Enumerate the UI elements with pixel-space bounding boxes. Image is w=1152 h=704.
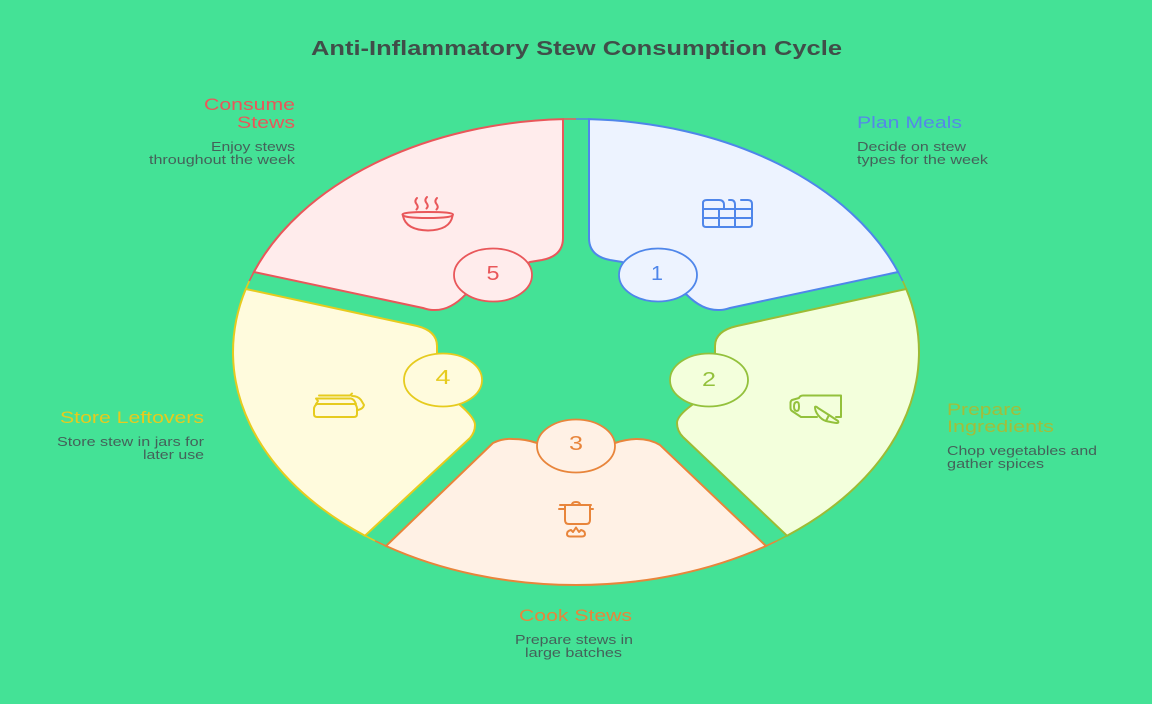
number badge 1	[619, 248, 697, 302]
text block: prepare ingredients: gather spices	[947, 456, 1045, 471]
text block: consume stews	[149, 95, 296, 167]
text block: plan meals: Decide on stew	[857, 139, 967, 154]
number badge 4	[404, 354, 482, 406]
icon: jar with lid	[314, 394, 364, 417]
number badge 2: 2	[702, 369, 716, 391]
title: Anti-Inflammatory Stew Consumption Cycle	[311, 38, 842, 60]
icon: steaming bowl	[402, 197, 453, 230]
text block: prepare ingredients: Prepare	[947, 400, 1022, 419]
text block: prepare ingredients: Ingredients	[947, 417, 1054, 436]
text block: store leftovers: Store Leftovers	[60, 408, 204, 427]
text block: prepare ingredients	[947, 400, 1097, 471]
text block: consume stews: Stews	[237, 113, 295, 132]
text block: cook stews	[515, 606, 633, 660]
number badge 5	[454, 248, 532, 302]
text block: cook stews: Cook Stews	[519, 606, 632, 625]
number badge 2	[670, 354, 748, 406]
text block: store leftovers	[57, 408, 205, 462]
panel: step 4 store leftovers segment	[233, 281, 482, 541]
number badge 3	[537, 420, 615, 472]
icon: cutting board and knife	[790, 396, 841, 423]
text block: cook stews: Prepare stews in	[515, 632, 633, 647]
text block: consume stews: throughout the week	[149, 152, 296, 167]
text block: plan meals: types for the week	[857, 152, 989, 167]
panel: step 2 prepare ingredients segment	[670, 281, 919, 541]
text block: store leftovers: Store stew in jars for	[57, 434, 205, 449]
panel: step 1 plan meals segment	[576, 119, 903, 310]
text block: plan meals: Plan Meals	[857, 113, 962, 132]
icon: pot on flame	[559, 502, 593, 536]
number badge 1: 1	[651, 263, 663, 285]
icon: calendar grid	[703, 200, 752, 227]
number badge 3: 3	[569, 433, 583, 455]
text block: consume stews: Consume	[204, 95, 295, 114]
panel: step 3 cook stews segment	[375, 420, 777, 585]
text block: cook stews: large batches	[525, 645, 623, 660]
panel: step 5 consume stews segment	[249, 119, 576, 310]
number badge 4: 4	[436, 367, 450, 389]
text block: prepare ingredients: Chop vegetables and	[947, 443, 1097, 458]
text block: consume stews: Enjoy stews	[211, 139, 296, 154]
text block: plan meals	[857, 113, 989, 167]
number badge 5: 5	[486, 263, 500, 285]
text block: store leftovers: later use	[143, 447, 204, 462]
